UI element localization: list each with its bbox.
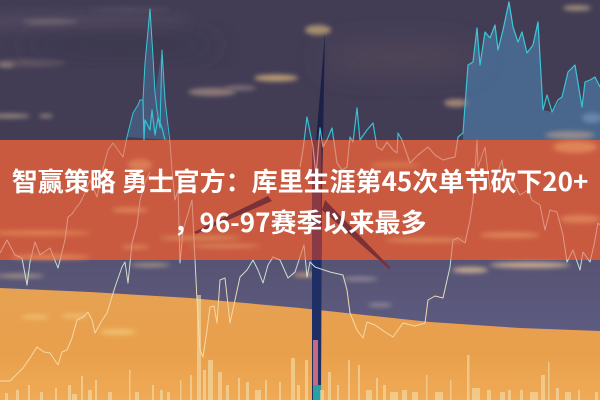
turbine tower (312, 190, 322, 400)
chart line (0, 9, 195, 285)
title: ，96-97赛季以来最多 (174, 203, 426, 240)
red title band (0, 140, 600, 260)
band sunset glows (0, 141, 600, 260)
area under chart line (463, 2, 600, 140)
turbine blade right (322, 200, 391, 269)
wind turbine (194, 33, 391, 400)
title: 智赢策略 勇士官方：库里生涯第45次单节砍下20+ (12, 162, 588, 199)
turbine blade up (312, 33, 325, 190)
horizon ground (0, 288, 600, 400)
ground cloud streaks (21, 314, 136, 335)
lower sky clouds (0, 262, 570, 307)
clouds (0, 5, 600, 139)
volume bars (5, 295, 598, 400)
turbine blade left (194, 196, 272, 234)
title (12, 162, 588, 240)
